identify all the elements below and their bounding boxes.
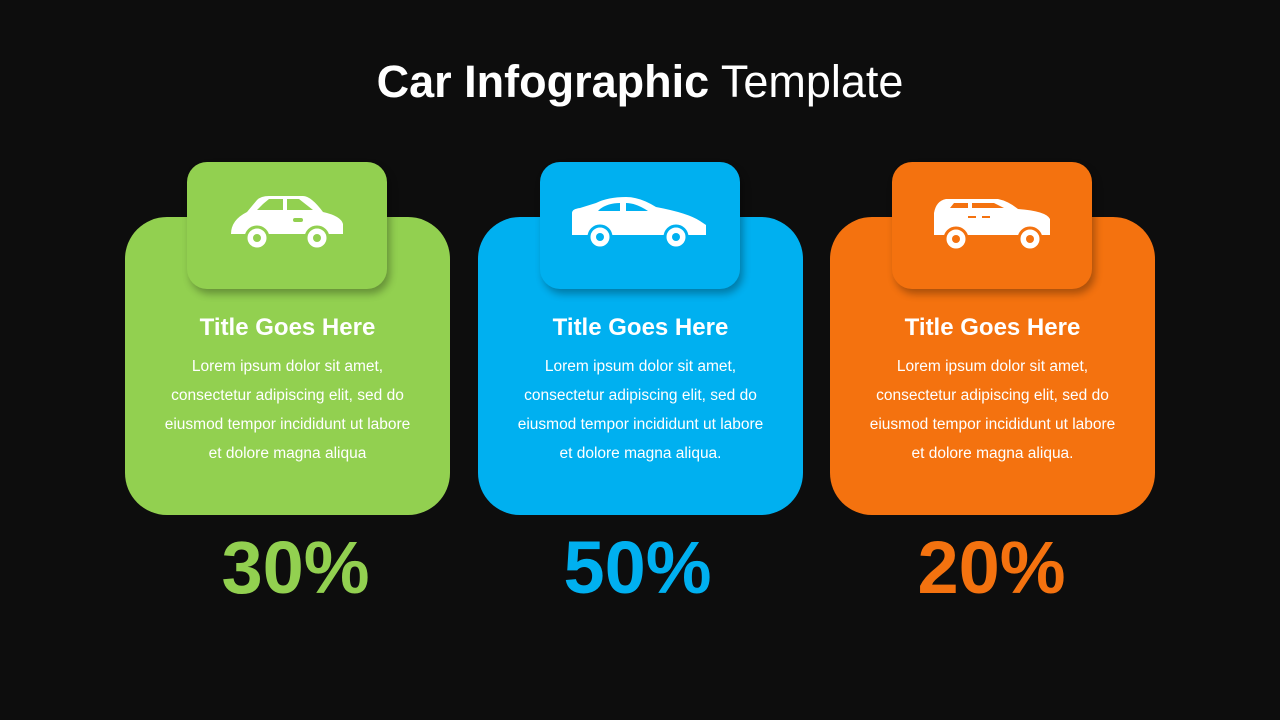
card text: et dolore magna aliqua. <box>559 445 722 462</box>
card text <box>518 358 763 462</box>
card text: consectetur adipiscing elit, sed do <box>876 387 1109 404</box>
card text: eiusmod tempor incididunt ut labore <box>870 416 1115 433</box>
card text: consectetur adipiscing elit, sed do <box>171 387 404 404</box>
icon tab: SUV <box>892 162 1092 289</box>
percent green: 30% <box>221 526 370 609</box>
card text: eiusmod tempor incididunt ut labore <box>518 416 763 433</box>
panel: green card <box>125 217 450 515</box>
card text: Lorem ipsum dolor sit amet, <box>897 358 1088 375</box>
card text: Lorem ipsum dolor sit amet, <box>192 358 383 375</box>
panel: blue card <box>478 217 803 515</box>
card title: Title Goes Here <box>200 314 375 341</box>
card text: et dolore magna aliqua. <box>911 445 1074 462</box>
card text: eiusmod tempor incididunt ut labore <box>165 416 410 433</box>
card title: Title Goes Here <box>905 314 1080 341</box>
card text: Lorem ipsum dolor sit amet, <box>545 358 736 375</box>
panel: orange card <box>830 217 1155 515</box>
percent blue: 50% <box>563 526 712 609</box>
card text <box>870 358 1115 462</box>
card text <box>165 358 410 462</box>
card title: Title Goes Here <box>553 314 728 341</box>
percent orange: 20% <box>917 526 1066 609</box>
card text: et dolore magna aliqua <box>209 445 366 462</box>
icon tab: hatchback <box>187 162 387 289</box>
card text: consectetur adipiscing elit, sed do <box>524 387 757 404</box>
icon tab: sedan <box>540 162 740 289</box>
title: Car Infographic Template <box>377 56 903 107</box>
